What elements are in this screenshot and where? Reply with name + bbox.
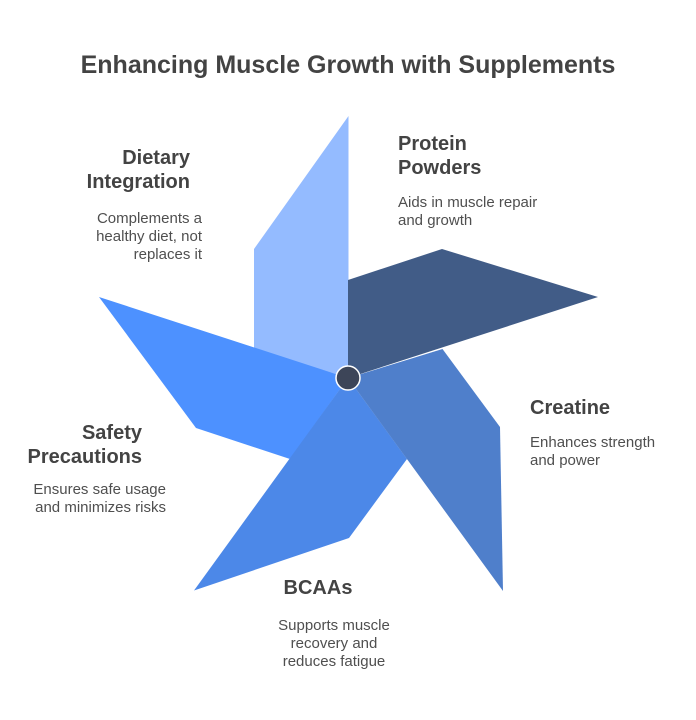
label: safety precautions <box>28 422 166 516</box>
blade: dietary integration <box>254 116 348 378</box>
text: BCAAs description: Supports muscle <box>278 617 390 634</box>
text: BCAAs description <box>278 617 390 670</box>
label: BCAAs <box>278 577 390 670</box>
text: creatine description <box>530 434 655 469</box>
text: dietary integration description <box>96 210 202 263</box>
text: dietary integration description: Complements a <box>97 210 202 227</box>
text: creatine description: and power <box>530 452 600 469</box>
title: Enhancing Muscle Growth with Supplements <box>81 51 615 79</box>
heading: safety precautions: Safety <box>82 422 142 444</box>
text: dietary integration description: replaces it <box>134 246 202 263</box>
text: protein powders description: Aids in muscle repair <box>398 194 537 211</box>
blade: BCAAs <box>194 378 407 590</box>
heading: dietary integration <box>87 147 190 193</box>
label: protein powders <box>398 133 537 229</box>
label: dietary integration <box>87 147 202 263</box>
heading: dietary integration: Dietary <box>122 147 190 169</box>
text: safety precautions description: and minimizes risks <box>35 499 166 516</box>
text: protein powders description <box>398 194 537 229</box>
blade: safety precautions <box>99 297 348 459</box>
text: BCAAs description: recovery and <box>291 635 377 652</box>
center hub <box>336 366 360 390</box>
text: safety precautions description: Ensures safe usage <box>33 481 166 498</box>
heading: protein powders: Powders <box>398 157 481 179</box>
heading: BCAAs: BCAAs <box>284 577 352 599</box>
text: BCAAs description: reduces fatigue <box>283 653 385 670</box>
heading: protein powders: Protein <box>398 133 467 155</box>
heading: protein powders <box>398 133 481 179</box>
blade: creatine <box>348 349 503 591</box>
text: safety precautions description <box>33 481 166 516</box>
heading: dietary integration: Integration <box>87 171 190 193</box>
heading: safety precautions <box>28 422 142 468</box>
heading: safety precautions: Precautions <box>28 446 142 468</box>
heading: creatine: Creatine <box>530 397 610 419</box>
blade: protein powders <box>348 249 598 378</box>
text: protein powders description: and growth <box>398 212 472 229</box>
label: creatine <box>530 397 655 469</box>
text: creatine description: Enhances strength <box>530 434 655 451</box>
text: dietary integration description: healthy diet, not <box>96 228 202 245</box>
